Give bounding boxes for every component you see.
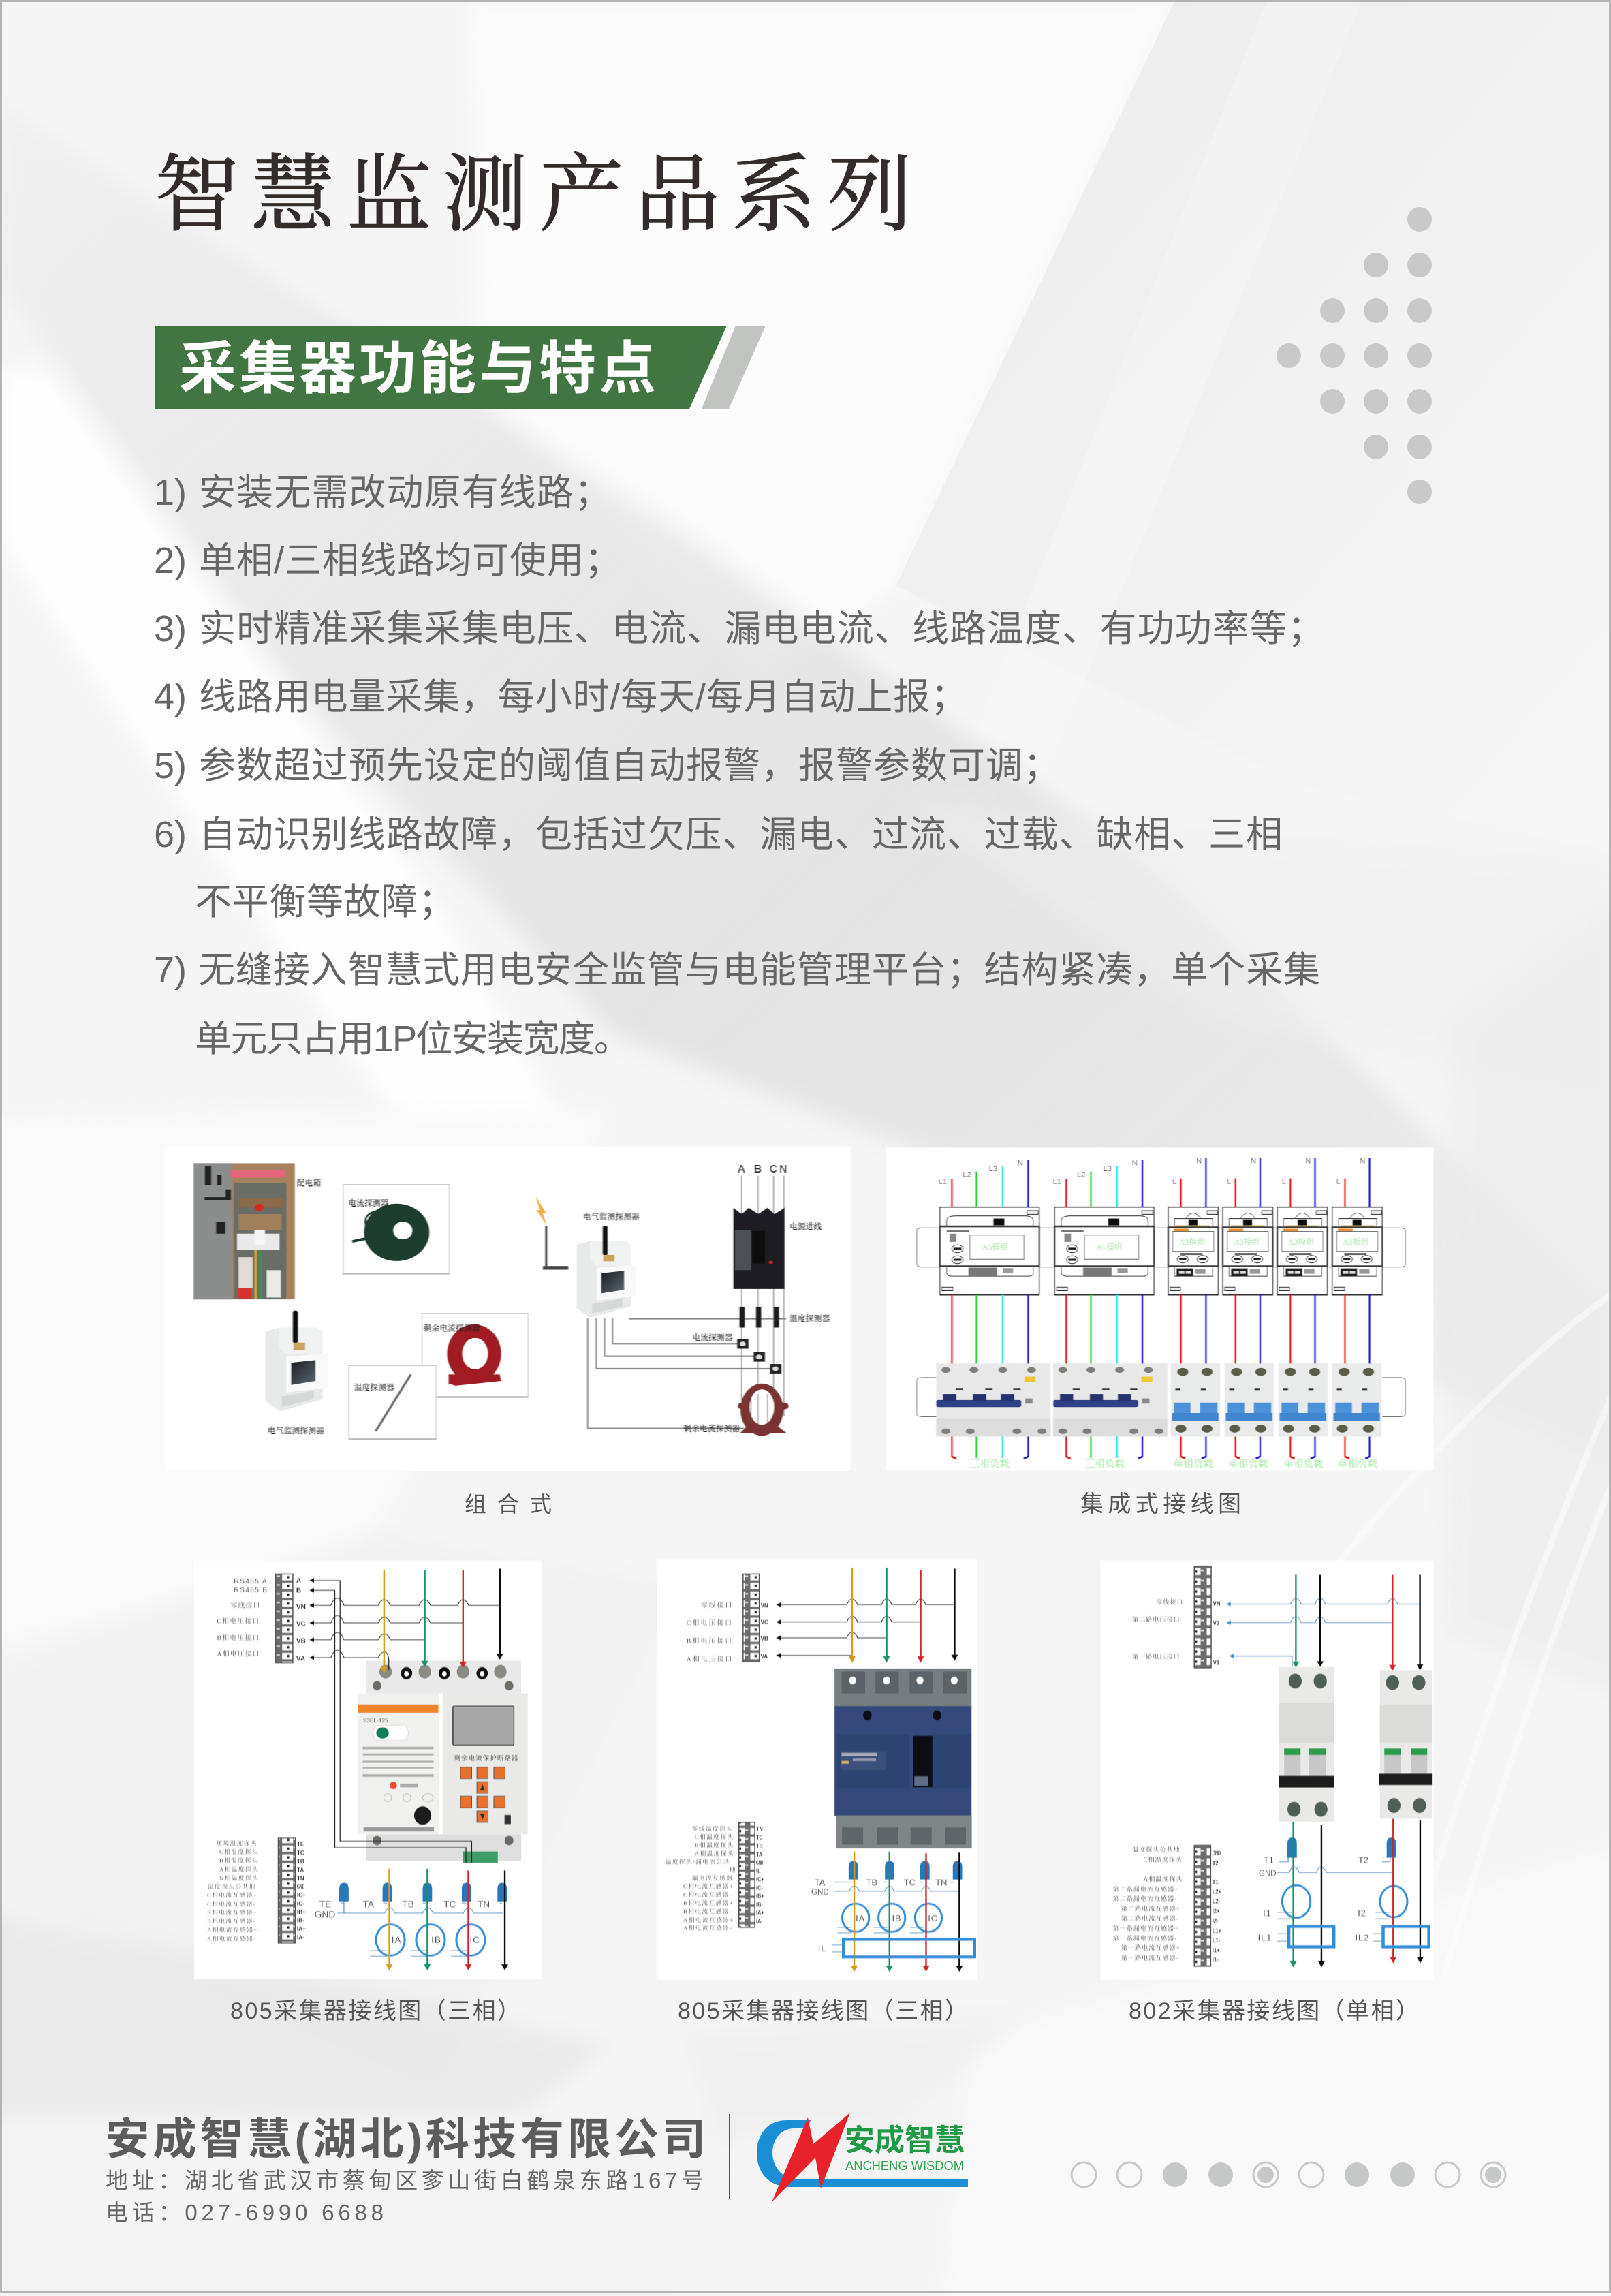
terminal labels bottom: I2+	[1213, 1907, 1220, 1914]
terminal labels top: RS485 A	[234, 1578, 268, 1585]
item 7: 7)	[154, 950, 187, 991]
terminal labels bottom: IC+	[756, 1876, 764, 1883]
terminal labels bottom: A相温度探头	[1144, 1875, 1183, 1882]
terminal labels bottom: GND	[297, 1884, 304, 1891]
sensor labels: IL	[818, 1943, 826, 1953]
terminal labels top: VC	[296, 1621, 307, 1628]
moulded case circuit breaker	[834, 1669, 972, 1848]
terminal labels top: VN	[296, 1603, 306, 1611]
panel: 802 collector single phase	[1100, 1561, 1434, 1980]
terminal labels top: B相电压接口	[687, 1636, 733, 1645]
terminal labels top: VN	[761, 1602, 768, 1609]
item 5: 参数超过预先设定的阈值自动报警，报警参数可调；	[199, 745, 1060, 786]
terminal labels bottom: IB+	[756, 1893, 764, 1899]
terminal labels top: VA	[296, 1656, 306, 1663]
voltage wires	[779, 1599, 954, 1656]
schematic labels: 电气监测探测器	[583, 1212, 640, 1222]
terminal labels top: VN	[1213, 1600, 1220, 1607]
card: temperature probe	[349, 1365, 436, 1440]
terminal labels top: B相电压接口	[217, 1634, 260, 1642]
terminal labels top: 零线接口	[1156, 1598, 1183, 1605]
terminal labels top: A相电压接口	[687, 1655, 734, 1663]
terminal labels bottom: A相电流互感器-	[683, 1924, 733, 1932]
sensor labels: TA	[362, 1899, 375, 1910]
wire and module labels: A3模组	[1179, 1237, 1205, 1247]
terminal labels bottom: 第一路电流互感器-	[1121, 1954, 1179, 1961]
terminal labels bottom: A相温度探头	[219, 1865, 259, 1872]
terminal labels top: 零线接口	[230, 1602, 260, 1610]
terminal labels bottom: 温度探头公共地	[208, 1882, 256, 1890]
caption: combined: 组合式	[465, 1492, 552, 1517]
terminal labels bottom: IA-	[756, 1918, 763, 1925]
wire and module labels: 单相负载	[1283, 1458, 1324, 1470]
terminal labels top: RS485 B	[234, 1587, 268, 1594]
feature list	[154, 472, 1324, 1059]
sensor labels: TA	[815, 1878, 826, 1888]
terminal block top	[276, 1574, 293, 1663]
terminal labels bottom: T1	[1213, 1878, 1219, 1886]
terminal labels bottom: 第一路漏电流互感器-	[1112, 1934, 1177, 1942]
schematic labels	[583, 1163, 830, 1433]
wire and module labels: 单相负载	[1174, 1458, 1213, 1470]
item 2: 2)	[154, 540, 187, 581]
terminal labels top: 第二路电压接口	[1132, 1615, 1180, 1623]
terminal block bottom	[278, 1838, 296, 1943]
terminal labels bottom: IA-	[297, 1934, 304, 1941]
sensor labels	[811, 1878, 947, 1953]
breaker module	[358, 1661, 528, 1863]
sensor labels: TN	[478, 1899, 490, 1910]
terminal labels bottom: TA	[297, 1866, 304, 1873]
terminal labels bottom: TC	[756, 1834, 763, 1841]
terminal labels top: C相电压接口	[217, 1617, 260, 1625]
terminal labels top: VA	[761, 1652, 768, 1660]
card: temperature probe: 温度探测器	[354, 1382, 394, 1392]
coloured wires	[952, 1158, 1370, 1459]
terminal labels bottom: IC-	[297, 1900, 304, 1907]
terminal labels bottom: 环境温度探头	[216, 1839, 257, 1846]
terminal labels top: 第一路电压接口	[1132, 1652, 1180, 1660]
terminal labels bottom: I1-	[1213, 1956, 1219, 1964]
wire and module labels: L2	[963, 1170, 971, 1179]
terminal labels top	[1132, 1598, 1220, 1666]
sensor labels: TB	[402, 1899, 414, 1910]
terminal block bottom	[739, 1822, 755, 1927]
terminal labels top: A相电压接口	[217, 1650, 260, 1658]
sensor labels: IL2	[1356, 1932, 1369, 1942]
sensor labels: IB	[431, 1935, 441, 1945]
card: residual current probe	[422, 1314, 528, 1397]
sensor labels: TN	[935, 1878, 947, 1888]
wire and module labels: N	[1251, 1157, 1256, 1165]
terminal labels bottom: A相电流互感器+	[683, 1916, 734, 1923]
terminal labels bottom: L1-	[1213, 1936, 1220, 1944]
terminal labels bottom: TN	[756, 1826, 763, 1833]
sensor labels: TB	[866, 1878, 877, 1888]
terminal labels bottom: 温度探头/漏电流公共	[666, 1857, 730, 1865]
wire and module labels: N	[1196, 1157, 1202, 1165]
sensor labels: TC	[443, 1899, 456, 1910]
card: residual current probe: 剩余电流探测器	[424, 1323, 480, 1333]
wire and module labels: L	[1336, 1177, 1341, 1185]
sensor labels: GND	[811, 1887, 829, 1897]
phase wires top	[852, 1568, 954, 1658]
terminal labels bottom: TN	[297, 1874, 304, 1882]
logo: 安成智慧	[845, 2124, 965, 2157]
sensor labels: IA	[856, 1913, 865, 1923]
footer: company name: 安成智慧(湖北)科技有限公司	[106, 2115, 706, 2164]
phase wires top	[1296, 1574, 1420, 1665]
terminal labels bottom: TB	[756, 1843, 763, 1850]
icon: monitor device in schematic	[576, 1226, 636, 1318]
schematic labels: N	[779, 1163, 787, 1175]
terminal labels bottom	[666, 1825, 764, 1932]
terminal labels bottom: A相电流互感器-	[207, 1934, 257, 1942]
terminal block top	[1194, 1566, 1211, 1668]
schematic labels: B	[754, 1163, 762, 1175]
terminal labels top: C相电压接口	[687, 1619, 733, 1627]
panel: 805 collector with monitor breaker	[194, 1561, 542, 1979]
terminal labels top	[687, 1601, 768, 1663]
terminal labels bottom: C相电流互感器+	[207, 1891, 257, 1899]
sensor labels: T2	[1358, 1855, 1368, 1865]
terminal labels bottom: 温度探头公共地	[1132, 1846, 1180, 1853]
terminal labels bottom: T2	[1213, 1859, 1219, 1867]
terminal labels bottom: I1+	[1213, 1946, 1220, 1954]
terminal labels bottom: IL	[756, 1868, 761, 1874]
caption: 802 single phase: 802采集器接线图（单相）	[1129, 1998, 1419, 2024]
miniature breaker 2	[1379, 1670, 1432, 1818]
wire and module labels: L	[1227, 1177, 1231, 1185]
terminal labels bottom: TA	[756, 1851, 762, 1858]
terminal labels top: VB	[296, 1637, 306, 1645]
voltage and RS485 wires	[313, 1581, 500, 1863]
item 7: 单元只占用1P位安装宽度。	[195, 1019, 631, 1059]
terminal labels bottom: 零线温度探头	[692, 1825, 733, 1832]
item 6: 自动识别线路故障，包括过欠压、漏电、过流、过载、缺相、三相	[199, 814, 1283, 855]
terminal labels bottom: TC	[297, 1849, 304, 1857]
item 6: 6)	[154, 814, 187, 855]
wire and module labels: N	[1305, 1157, 1311, 1165]
terminal labels bottom: C相温度探头	[1144, 1856, 1183, 1863]
wire and module labels: N	[1132, 1159, 1138, 1167]
section heading banner	[155, 326, 766, 409]
terminal labels bottom: 第一路漏电流互感器+	[1112, 1925, 1178, 1932]
terminal labels top: VC	[761, 1618, 768, 1626]
sensors, current transformers and load wires	[1277, 1818, 1429, 1968]
item 4: 线路用电量采集，每小时/每天/每月自动上报；	[199, 677, 967, 717]
terminal labels bottom: IB-	[297, 1917, 304, 1924]
item 4: 4)	[154, 677, 187, 717]
terminal labels bottom: N相温度探头	[219, 1874, 259, 1881]
wire and module labels: A5模组	[1097, 1242, 1123, 1252]
item 3: 3)	[154, 608, 187, 649]
sensor labels: GND	[315, 1909, 335, 1919]
terminal labels top: 零线接口	[701, 1601, 734, 1609]
sensor labels: TC	[904, 1878, 916, 1888]
item 3: 实时精准采集采集电压、电流、漏电电流、线路温度、有功功率等；	[199, 608, 1324, 649]
terminal labels bottom: 第二路电流互感器+	[1121, 1904, 1180, 1912]
terminal block bottom	[1194, 1845, 1210, 1966]
terminal block top	[743, 1574, 760, 1662]
breaker module: 剩余电流保护断路器	[454, 1754, 518, 1763]
wire and module labels: A3模组	[1343, 1237, 1368, 1247]
sensor labels: IB	[892, 1913, 902, 1923]
terminal labels bottom	[207, 1839, 306, 1942]
phase wires top	[384, 1568, 500, 1670]
wire and module labels: L	[1172, 1177, 1176, 1185]
sensor labels: GND	[1259, 1868, 1277, 1878]
terminal labels bottom: A相温度探头	[695, 1849, 734, 1857]
terminal labels bottom: GND	[1213, 1850, 1221, 1857]
wire and module labels: 三相负载	[970, 1458, 1010, 1470]
sensor labels	[1258, 1855, 1369, 1942]
wire and module labels: L3	[1104, 1165, 1112, 1173]
terminal labels bottom: IC+	[297, 1891, 306, 1899]
wire and module labels: A3模组	[1288, 1237, 1314, 1247]
item 6: 不平衡等故障；	[195, 882, 455, 922]
din rails	[917, 1228, 1405, 1416]
breakers	[936, 1363, 1381, 1436]
wire and module labels	[939, 1157, 1378, 1470]
card: current probe	[343, 1185, 450, 1274]
wire and module labels: 三相负载	[1085, 1458, 1125, 1470]
distribution cabinet photo	[193, 1163, 295, 1299]
terminal labels top: V2	[1213, 1619, 1219, 1627]
voltage wires	[1230, 1598, 1420, 1667]
schematic labels: C	[769, 1163, 777, 1175]
item 7: 无缝接入智慧式用电安全监管与电能管理平台；结构紧凑，单个采集	[198, 950, 1320, 991]
sensors, current transformers and load wires	[337, 1869, 508, 1970]
footer divider	[729, 2114, 730, 2199]
logo	[757, 2113, 968, 2202]
miniature breaker 1	[1279, 1667, 1334, 1822]
terminal labels bottom: IA+	[297, 1925, 306, 1932]
terminal labels bottom: 第二路漏电流互感器+	[1112, 1885, 1178, 1893]
terminal labels top	[217, 1577, 307, 1663]
icon: wireless antenna	[535, 1196, 569, 1270]
terminal labels top: VB	[761, 1634, 768, 1642]
terminal labels bottom: I2-	[1213, 1917, 1219, 1924]
breaker module: S3EL-125	[363, 1718, 388, 1724]
terminal labels bottom: L2+	[1213, 1888, 1221, 1895]
label: monitor device: 电气监测探测器	[268, 1426, 324, 1436]
wire and module labels: L	[1282, 1177, 1286, 1185]
sensor labels: I1	[1263, 1908, 1272, 1919]
item 5: 5)	[154, 745, 187, 786]
wire and module labels: N	[1018, 1159, 1023, 1167]
item 1: 安装无需改动原有线路；	[199, 472, 611, 513]
sensor labels: IC	[469, 1935, 480, 1945]
title: 智慧监测产品系列	[155, 149, 912, 242]
sensor labels: TE	[319, 1899, 331, 1910]
caption: integrated wiring: 集成式接线图	[1080, 1491, 1241, 1517]
terminal labels bottom: C相电流互感器+	[683, 1882, 734, 1890]
sensor labels: IA	[392, 1935, 401, 1945]
section heading banner: 采集器功能与特点	[179, 337, 656, 401]
terminal labels bottom: L1+	[1213, 1927, 1221, 1934]
terminal labels bottom: TE	[297, 1840, 304, 1848]
terminal labels bottom: IC-	[756, 1884, 763, 1891]
terminal labels bottom: B相电流互感器-	[207, 1917, 256, 1925]
wire and module labels: L1	[1052, 1177, 1061, 1185]
panel: integrated wiring	[886, 1147, 1433, 1470]
terminal labels bottom: IA+	[756, 1910, 764, 1917]
wire and module labels: L1	[939, 1177, 947, 1185]
card: current probe: 电流探测器	[348, 1198, 389, 1208]
label: cabinet: 配电箱	[297, 1178, 321, 1188]
schematic labels: 电流探测器	[692, 1333, 733, 1342]
wire and module labels: A5模组	[982, 1242, 1008, 1252]
meters	[940, 1207, 1382, 1295]
terminal labels bottom: TB	[297, 1858, 304, 1865]
wire and module labels: L2	[1077, 1170, 1085, 1179]
wire and module labels: 单相负载	[1338, 1458, 1378, 1470]
sensor labels: IL1	[1258, 1932, 1272, 1942]
terminal labels bottom: 地	[730, 1865, 736, 1873]
terminal labels bottom: B相电流互感器-	[683, 1907, 732, 1914]
terminal labels bottom: C相电流互感器-	[207, 1899, 256, 1907]
sensors, current transformers and load wires	[832, 1852, 975, 1972]
terminal labels bottom: L2-	[1213, 1897, 1220, 1905]
wire and module labels: A3模组	[1234, 1237, 1260, 1247]
sensor labels: IC	[928, 1913, 938, 1923]
item 7	[154, 950, 1320, 1059]
caption: 805 three phase A: 805采集器接线图（三相）	[230, 1998, 520, 2024]
terminal labels bottom	[1112, 1846, 1221, 1964]
terminal labels top: B	[296, 1587, 301, 1594]
schematic labels: 剩余电流探测器	[683, 1424, 740, 1433]
icon: monitor device	[265, 1311, 328, 1412]
terminal labels bottom: C相温度探头	[219, 1848, 259, 1855]
terminal labels bottom: B相温度探头	[219, 1857, 259, 1864]
item 6	[154, 814, 1283, 922]
terminal labels bottom: 漏电流互感器	[692, 1874, 733, 1881]
terminal labels bottom: 第二路漏电流互感器-	[1112, 1895, 1177, 1902]
terminal labels top: V1	[1213, 1659, 1219, 1666]
terminal labels bottom: C相温度探头	[695, 1833, 734, 1840]
item 2: 单相/三相线路均可使用；	[199, 540, 621, 581]
wiring schematic	[588, 1176, 789, 1436]
sensor labels: T1	[1264, 1855, 1274, 1865]
sensor labels: I2	[1358, 1908, 1366, 1919]
footer: phone: 电话：027-6990 6688	[106, 2200, 384, 2225]
terminal labels bottom: C相电流互感器-	[683, 1891, 732, 1898]
terminal labels bottom: IB+	[297, 1908, 306, 1915]
terminal labels bottom: 第一路电流互感器+	[1121, 1944, 1180, 1951]
terminal labels top: A	[296, 1577, 302, 1585]
pagination dots	[1072, 2162, 1505, 2187]
decorative dot triangle	[1277, 207, 1432, 504]
terminal labels bottom: 第二路电流互感器-	[1121, 1914, 1179, 1922]
terminal labels bottom: B相温度探头	[695, 1841, 734, 1848]
terminal labels bottom: IB-	[756, 1902, 763, 1908]
logo: ANCHENG WISDOM	[845, 2159, 964, 2173]
item 1: 1)	[154, 472, 187, 513]
sensor labels	[315, 1899, 490, 1945]
terminal labels bottom: A相电流互感器+	[207, 1925, 258, 1933]
schematic labels: 温度探测器	[789, 1314, 830, 1323]
panel: combined wiring	[164, 1147, 851, 1471]
schematic labels: 电源进线	[789, 1222, 822, 1232]
terminal labels bottom: B相电流互感器+	[207, 1908, 257, 1916]
panel: 805 collector with moulded case breaker	[657, 1559, 977, 1980]
schematic labels: A	[738, 1163, 746, 1175]
terminal labels bottom: B相电流互感器+	[683, 1899, 734, 1906]
wire and module labels: 单相负载	[1228, 1458, 1268, 1470]
terminal labels bottom: GND	[756, 1861, 763, 1866]
caption: 805 three phase B: 805采集器接线图（三相）	[678, 1998, 968, 2024]
wire and module labels: L3	[989, 1165, 997, 1173]
footer: address: 地址：湖北省武汉市蔡甸区奓山街白鹤泉东路167号	[106, 2168, 704, 2193]
wire and module labels: N	[1360, 1157, 1365, 1165]
